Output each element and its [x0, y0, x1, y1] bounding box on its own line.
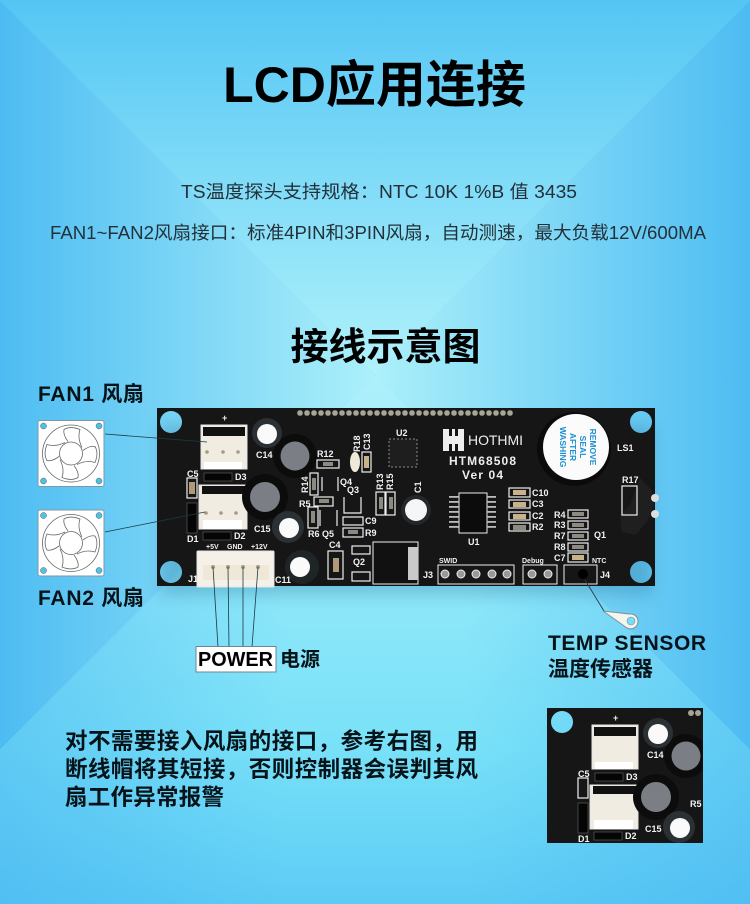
silkscreen labels: C14 — [256, 450, 273, 460]
note text: 扇工作异常报警 — [65, 785, 224, 810]
silkscreen labels: C3 — [532, 499, 544, 509]
photo: board detail with shorted connectors: D3 — [626, 772, 638, 782]
silkscreen labels: R3 — [554, 520, 566, 530]
title: LCD应用连接 — [223, 57, 526, 113]
version text: Ver 04 — [462, 468, 503, 482]
silkscreen labels: C9 — [365, 516, 377, 526]
silkscreen labels: Q5 — [322, 529, 334, 539]
silkscreen labels: R14 — [300, 476, 310, 493]
silkscreen labels: R4 — [554, 510, 566, 520]
silkscreen labels: R8 — [554, 542, 566, 552]
silkscreen labels: C7 — [554, 553, 566, 563]
silkscreen labels: Q4 — [340, 477, 352, 487]
note text: 断线帽将其短接，否则控制器会误判其风 — [65, 757, 478, 782]
connector: J1 power — [197, 551, 274, 587]
buzzer: WASHING — [558, 427, 568, 468]
silkscreen labels: +12V — [251, 544, 268, 551]
label: POWER box: POWER — [198, 649, 274, 671]
photo: board detail with shorted connectors — [547, 708, 708, 844]
silkscreen labels: NTC — [592, 558, 606, 565]
connection lines: fans and power — [105, 434, 258, 647]
note text: 对不需要接入风扇的接口，参考右图，用 — [65, 728, 478, 754]
photo: board detail with shorted connectors: C14 — [647, 750, 664, 760]
silkscreen labels: Q2 — [353, 557, 365, 567]
spec text: fan connector: FAN1~FAN2风扇接口：标准4PIN和3PIN风扇，自动测速，最大负载12V/600MA — [50, 223, 706, 243]
icon: temperature sensor — [585, 580, 638, 629]
label: FAN2: FAN2 风扇 — [38, 586, 144, 610]
silkscreen labels — [187, 413, 639, 585]
label: power in Chinese: 电源 — [280, 648, 320, 671]
buzzer: AFTER — [568, 433, 578, 461]
label: TEMP SENSOR: TEMP SENSOR — [548, 632, 706, 655]
silkscreen labels: U1 — [468, 537, 480, 547]
header J4 NTC — [564, 565, 597, 584]
silkscreen labels: R2 — [532, 522, 544, 532]
capacitors and inductors — [242, 418, 431, 584]
label: temperature sensor in Chinese: 温度传感器 — [548, 657, 653, 681]
heading: wiring diagram: 接线示意图 — [290, 327, 481, 369]
silkscreen labels: R13 — [375, 473, 385, 490]
SMD parts — [189, 456, 584, 572]
silkscreen labels: J1 — [188, 574, 198, 584]
solder joints — [620, 478, 659, 535]
silkscreen labels: Debug — [522, 558, 544, 565]
silkscreen labels: GND — [227, 544, 243, 551]
silkscreen labels: C1 — [413, 481, 423, 493]
silkscreen labels: R7 — [554, 531, 566, 541]
photo: board detail with shorted connectors: C5 — [578, 769, 590, 779]
small SMD pads — [187, 452, 637, 581]
silkscreen labels: D3 — [235, 472, 247, 482]
header debug — [523, 565, 557, 584]
silkscreen labels: J3 — [423, 570, 433, 580]
icon: fan 2 — [38, 510, 104, 576]
silkscreen labels: R5 — [299, 499, 311, 509]
silkscreen labels: C13 — [362, 433, 372, 450]
photo: board detail with shorted connectors: D2 — [625, 831, 637, 841]
buzzer: SEAL — [578, 436, 588, 458]
silkscreen labels: D2 — [234, 531, 246, 541]
buzzer — [537, 412, 611, 486]
silkscreen labels: C5 — [187, 469, 199, 479]
note text — [65, 728, 478, 810]
silkscreen labels: R17 — [622, 475, 639, 485]
photo: board detail with shorted connectors: C15 — [645, 824, 662, 834]
connector: fan 1 — [201, 425, 247, 469]
silkscreen labels: LS1 — [617, 443, 634, 453]
silkscreen labels: R12 — [317, 449, 334, 459]
silkscreen labels: C4 — [329, 540, 341, 550]
silkscreen labels: R18 — [352, 435, 362, 452]
silkscreen labels: C11 — [275, 575, 291, 585]
silkscreen labels: Q1 — [594, 530, 606, 540]
diodes — [187, 473, 232, 540]
photo: board detail with shorted connectors: D1 — [578, 834, 590, 844]
silkscreen labels: C2 — [532, 511, 544, 521]
photo: board detail with shorted connectors: + — [613, 713, 618, 723]
silkscreen labels: D1 — [187, 534, 199, 544]
logo: HOTHMI — [443, 429, 523, 451]
silkscreen labels: +5V — [206, 544, 219, 551]
icon: fan 1 — [38, 420, 104, 486]
silkscreen labels: R6 — [308, 529, 320, 539]
silkscreen labels: Q3 — [347, 485, 359, 495]
silkscreen labels: + — [222, 413, 227, 423]
silkscreen labels: U2 — [396, 428, 408, 438]
chips — [373, 439, 496, 584]
silkscreen labels: SWID — [439, 558, 457, 565]
circuit board — [157, 408, 659, 595]
label: FAN1: FAN1 风扇 — [38, 382, 144, 406]
photo: board detail with shorted connectors: R5 — [690, 799, 702, 809]
silkscreen labels: J4 — [600, 570, 610, 580]
spec text: temperature probe: TS温度探头支持规格：NTC 10K 1%B 值 3435 — [181, 182, 577, 202]
silkscreen labels: C15 — [254, 524, 271, 534]
header J3 SWD — [438, 565, 514, 584]
silkscreen labels: R9 — [365, 528, 377, 538]
silkscreen labels: R15 — [385, 473, 395, 490]
header pins — [297, 410, 513, 416]
connector: fan 2 — [199, 485, 247, 529]
logo: HOTHMI: HOTHMI — [468, 432, 523, 448]
buzzer: REMOVE — [588, 429, 598, 466]
silkscreen labels: C10 — [532, 488, 549, 498]
model text: HTM68508 — [449, 454, 516, 468]
